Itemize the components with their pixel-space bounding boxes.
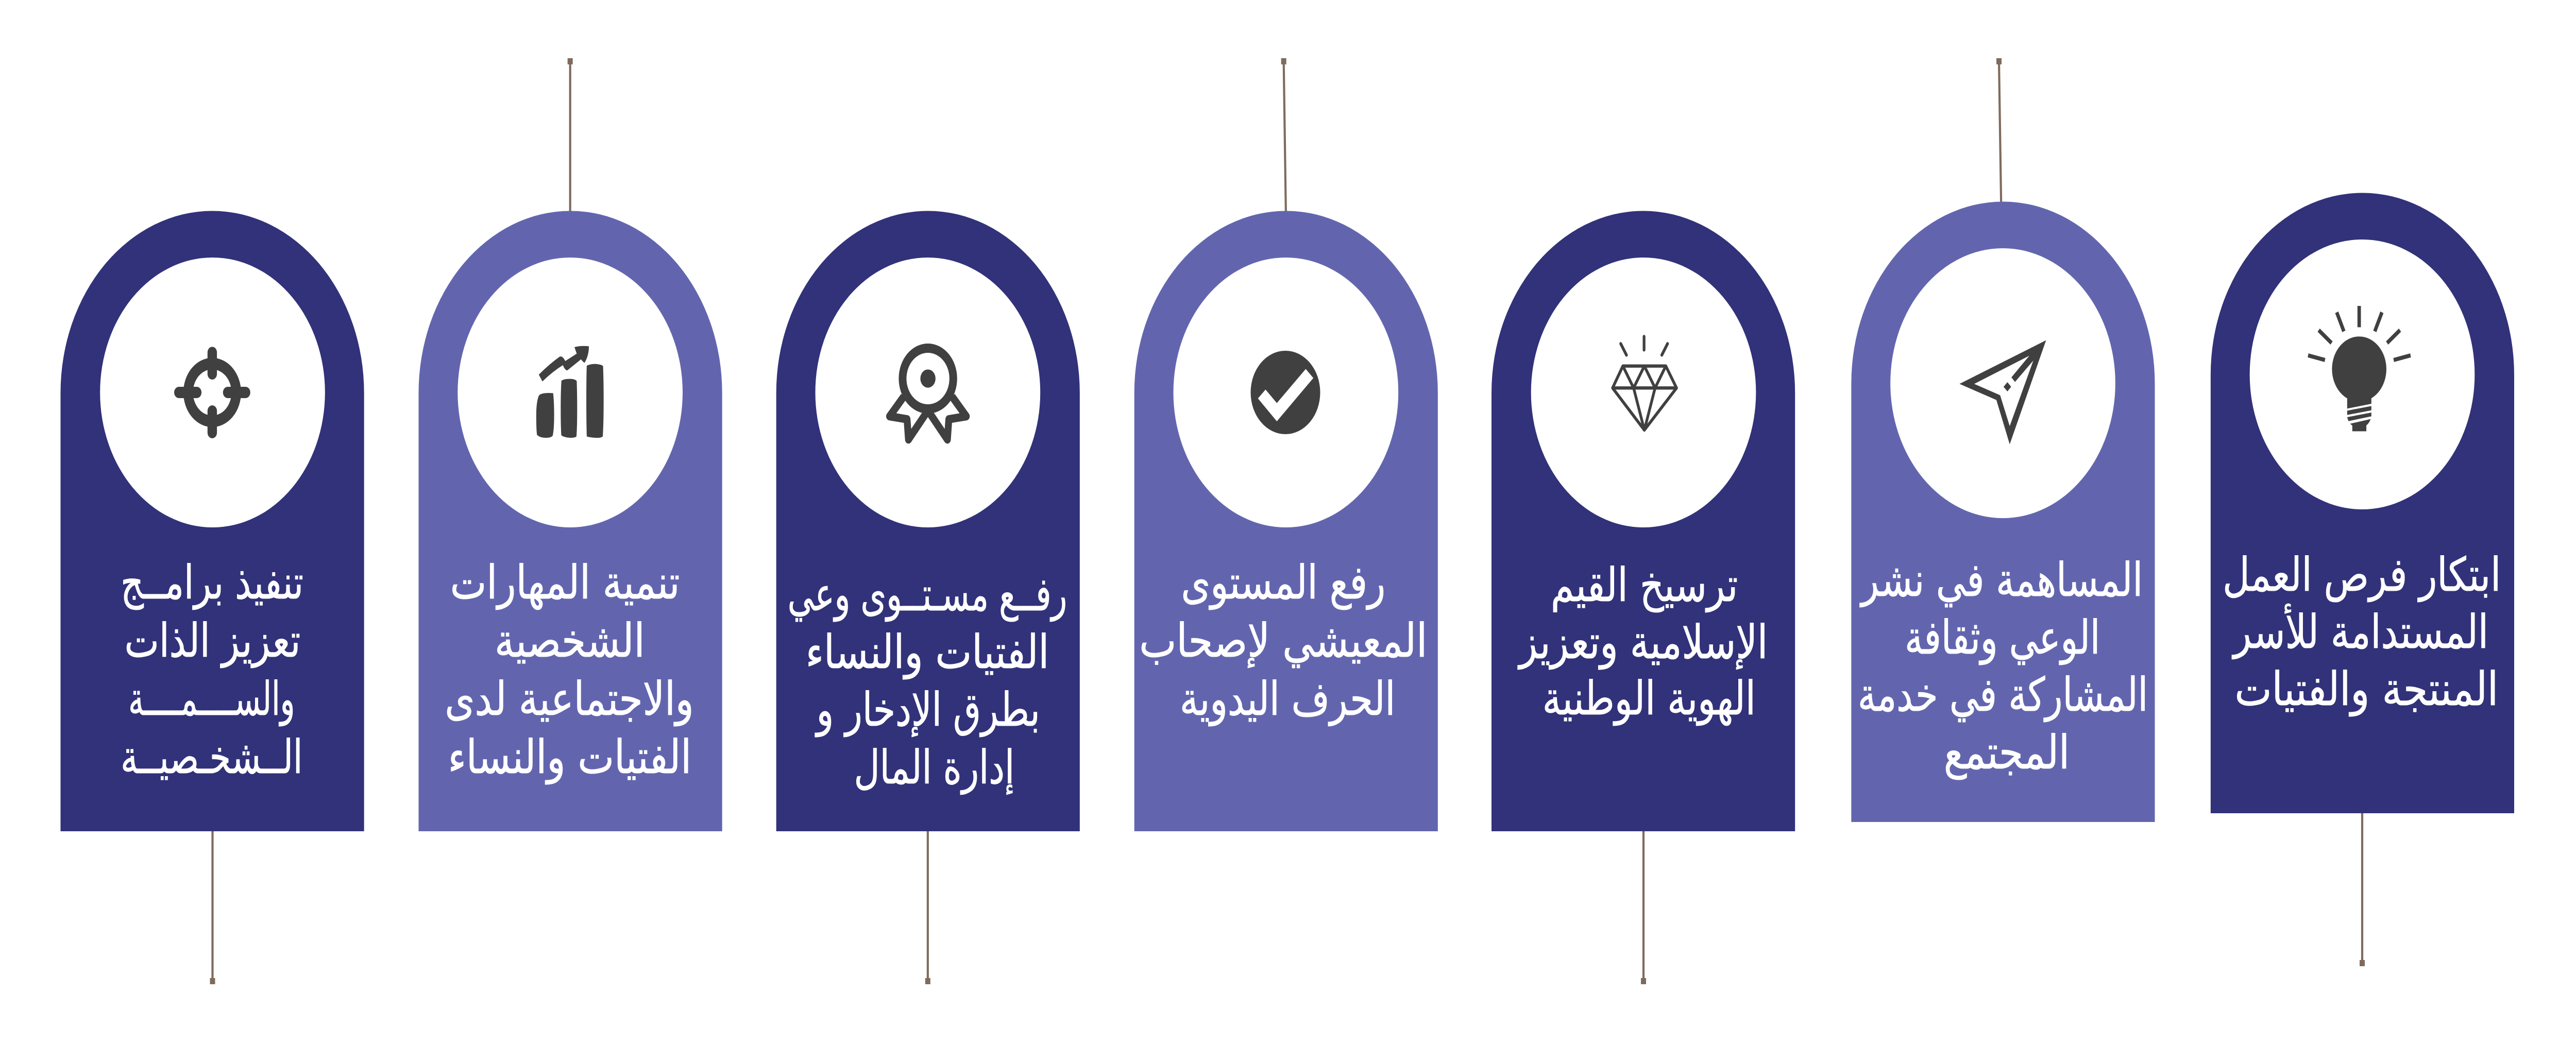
- icon circle 2: [457, 258, 683, 527]
- text: card 4: الحرف اليدوية: [1180, 672, 1395, 727]
- text: card 7: [2223, 547, 2501, 717]
- text: card 2: والاجتماعية لدى: [445, 672, 694, 727]
- text: card 7: المنتجة والفتيات: [2235, 662, 2498, 717]
- panel: card 1 self-confidence programmes: [61, 211, 364, 984]
- connector: card 7 bottom: [2360, 813, 2365, 966]
- text: card 1: [121, 555, 303, 784]
- icon circle 4: [1174, 258, 1398, 527]
- icon: target: [179, 352, 246, 433]
- text: card 6: [1858, 553, 2148, 780]
- panel: card 5 islamic values: [1492, 211, 1795, 984]
- icon circle 1: [100, 258, 325, 527]
- text: card 3: بطرق الإدخار و: [815, 682, 1040, 738]
- text: card 2: تنمية المهارات: [450, 555, 680, 610]
- icon: rising bar chart: [536, 346, 604, 438]
- card shape 2: [418, 211, 722, 831]
- text: card 2: الفتيات والنساء: [448, 730, 691, 785]
- text: card 5: الهوية الوطنية: [1543, 671, 1756, 726]
- connector: card 5 bottom: [1641, 831, 1646, 984]
- panel: card 6 community awareness: [1851, 58, 2155, 822]
- icon circle 6: [1890, 248, 2115, 518]
- text: card 3: رفــع مسـتــوى وعي: [788, 567, 1067, 622]
- icon circle 7: [2250, 239, 2475, 509]
- text: card 5: [1517, 558, 1768, 726]
- icon circle 3: [815, 258, 1040, 527]
- card shape 7: [2211, 193, 2514, 813]
- icon: light bulb: [2308, 306, 2411, 431]
- text: card 7: ابتكار فرص العمل: [2223, 547, 2501, 603]
- text: card 3: [788, 567, 1067, 795]
- panel: card 7 job opportunities: [2211, 193, 2514, 966]
- text: card 1: تنفيذ برامــج: [121, 555, 303, 610]
- connector: card 6 top: [1996, 58, 2002, 203]
- connector: card 1 bottom: [210, 831, 215, 984]
- card shape 3: [776, 211, 1080, 831]
- text: card 4: رفع المستوى: [1181, 555, 1385, 610]
- card shape 1: [61, 211, 364, 831]
- text: card 2: [445, 555, 694, 785]
- text: card 3: إدارة المال: [854, 740, 1014, 795]
- text: card 6: المساهمة في نشر: [1859, 553, 2143, 608]
- text: card 7: المستدامة للأسر: [2232, 603, 2488, 660]
- panel: card 2 skills development: [418, 58, 722, 831]
- text: card 2: الشخصية: [495, 613, 645, 668]
- text: card 5: ترسيخ القيم: [1551, 558, 1738, 613]
- text: card 4: المعيشي لإصحاب: [1139, 613, 1427, 669]
- card shape 5: [1492, 211, 1795, 831]
- icon: check mark: [1250, 351, 1320, 434]
- connector: card 3 bottom: [925, 831, 930, 984]
- text: card 1: تعزيز الذات: [125, 613, 300, 669]
- panel: card 3 financial awareness: [776, 211, 1080, 984]
- text: card 3: الفتيات والنساء: [806, 625, 1049, 680]
- card shape 4: [1134, 211, 1438, 831]
- text: card 5: الإسلامية وتعزيز: [1517, 615, 1768, 670]
- text: card 1: والســــمــــة: [128, 672, 295, 727]
- text: card 6: المجتمع: [1944, 725, 2070, 780]
- connector: card 4 top: [1281, 58, 1286, 211]
- icon circle 5: [1531, 258, 1756, 527]
- icon: award ribbon: [890, 348, 967, 439]
- text: card 6: المشاركة في خدمة: [1858, 667, 2148, 723]
- panel: card 4 living standards: [1134, 58, 1438, 831]
- text: card 4: [1139, 555, 1427, 727]
- card shape 6: [1851, 202, 2155, 822]
- icon: diamond: [1613, 336, 1676, 430]
- text: card 6: الوعي وثقافة: [1905, 610, 2100, 665]
- connector: card 2 top: [568, 58, 573, 211]
- text: card 1: الــشخـصيــة: [121, 730, 302, 784]
- icon: paper plane: [1959, 340, 2046, 444]
